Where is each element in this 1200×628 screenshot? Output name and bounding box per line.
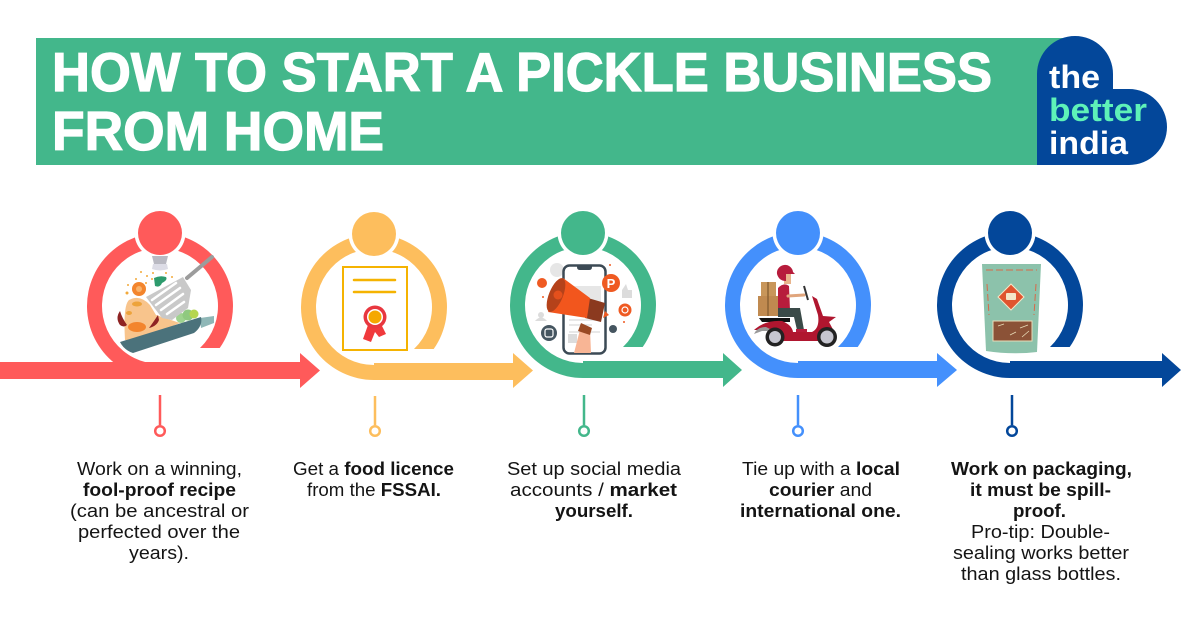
logo: the better india: better [1049,92,1147,128]
text: step 2 [293,459,454,500]
ring and arrow 3 [510,208,742,387]
text: step 5: it must be spill- [970,480,1111,500]
step 5: packaging [937,208,1181,584]
text: step 5 [951,459,1132,584]
text: step 4: international one. [740,501,901,521]
stem 4 [793,395,803,436]
text: step 5: than glass bottles. [961,564,1121,584]
stem 5 [1007,395,1017,436]
header banner [36,38,1076,165]
text: step 4 [740,459,901,521]
text: step 3: accounts / market [510,480,677,500]
ring and arrow 4 [725,208,957,387]
text: step 1 [70,459,249,563]
text: step 1: perfected over the [78,522,240,542]
text: step 3: yourself. [555,501,633,521]
stem 3 [579,395,589,436]
text: step 2: Get a food licence [293,459,454,479]
text: step 1: Work on a winning, [77,459,242,479]
title: FROM HOME [52,100,384,162]
logo: the better india: india [1049,125,1128,161]
icon: phone with megaphone: P [607,276,616,291]
text: step 4: courier and [769,480,872,500]
step 1: recipe [0,208,320,563]
text: step 3: Set up social media [507,459,682,479]
ring and arrow 2 [301,208,533,388]
ring and arrow 1 [0,208,320,388]
text: step 1: (can be ancestral or [70,501,249,521]
step 4: courier [725,208,957,521]
ring and arrow 5 [937,208,1181,387]
text: step 5: Pro-tip: Double- [971,522,1110,542]
stem 2 [370,396,380,436]
text: step 1: fool-proof recipe [83,480,236,500]
title [52,41,992,162]
stem 1 [155,395,165,436]
icon: delivery scooter rider [754,265,837,347]
icon: pouch bag [982,264,1041,353]
text: step 5: sealing works better [953,543,1129,563]
logo: the better india [1037,36,1167,165]
step 3: social media [507,208,742,521]
text: step 4: Tie up with a local [742,459,900,479]
icon: certificate [343,267,407,350]
step 2: licence [293,208,533,500]
icon: phone with megaphone [535,263,632,354]
text: step 5: proof. [1013,501,1066,521]
text: step 5: Work on packaging, [951,459,1132,479]
title: HOW TO START A PICKLE BUSINESS [52,41,992,103]
text: step 2: from the FSSAI. [307,480,441,500]
text: step 3 [507,459,682,521]
text: step 1: years). [129,543,189,563]
icon: frying pan with food [118,256,214,353]
logo: the better india: the [1049,59,1100,95]
